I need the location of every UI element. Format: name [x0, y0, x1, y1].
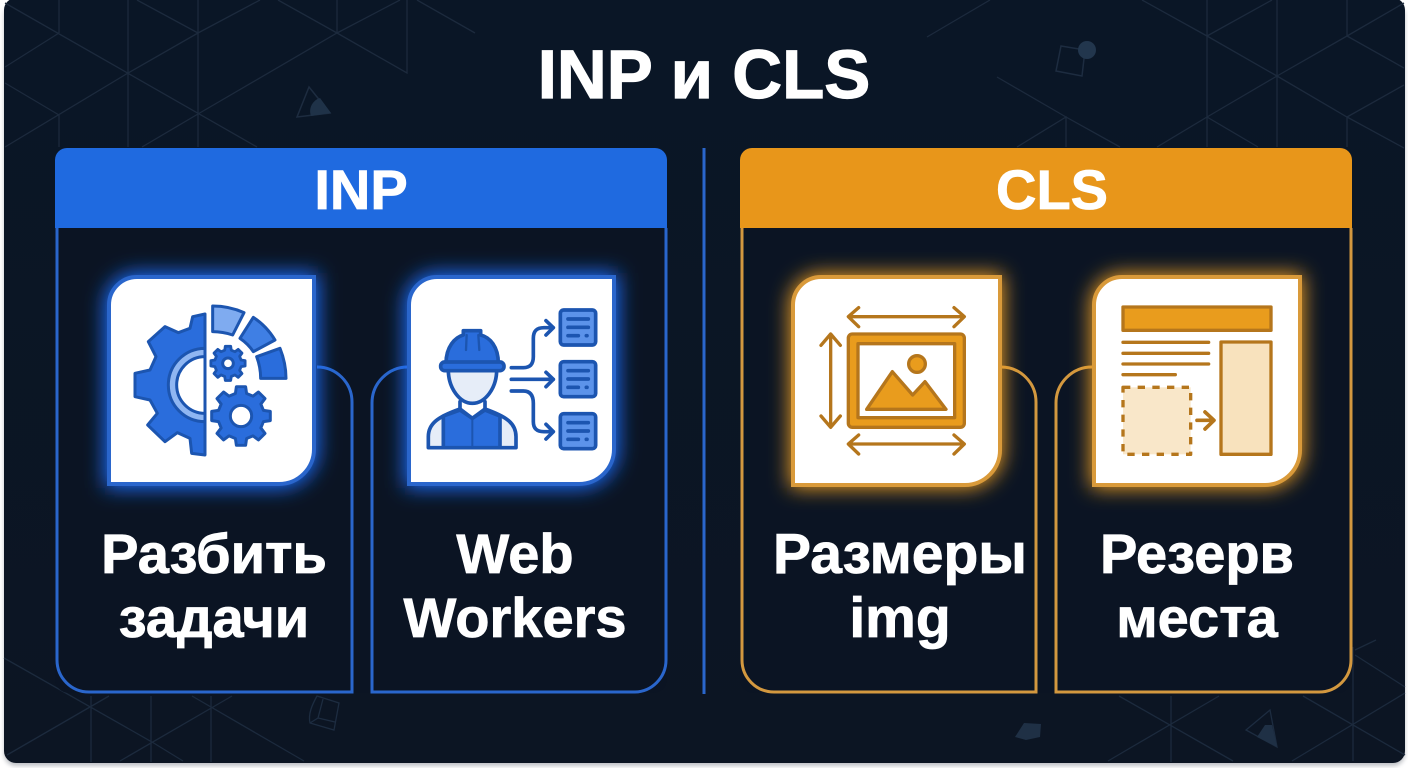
card: split tasks: [109, 277, 314, 484]
label: reserve space: места: [1116, 586, 1279, 649]
panel: CLS: [740, 148, 1352, 693]
title: INP и CLS: [538, 36, 870, 113]
background icon: triangle: [297, 87, 331, 117]
background icon: box: [309, 696, 339, 730]
panel: INP: [55, 148, 667, 693]
INP header: [55, 148, 667, 228]
icon: gears and progress: [135, 306, 286, 455]
label: image sizes: Размеры: [773, 522, 1027, 586]
divider: [702, 148, 706, 694]
icon: worker and task queue: [428, 310, 596, 449]
label: split tasks: Разбить: [101, 522, 327, 585]
connector: right bracket: [1056, 228, 1351, 692]
connector: left bracket: [742, 228, 1036, 692]
background icon: square and dot: [1056, 41, 1096, 76]
label: split tasks: задачи: [119, 586, 309, 649]
card: web workers: [409, 277, 614, 484]
label: web workers: Web: [456, 522, 574, 585]
INP heading: INP: [314, 158, 408, 221]
connector: right bracket: [372, 228, 666, 692]
CLS heading: CLS: [996, 158, 1108, 221]
background icon: blob: [1015, 723, 1041, 740]
background icon: triangle right: [1246, 710, 1277, 747]
icon: image with dimensions: [821, 308, 964, 454]
label: web workers: Workers: [403, 586, 627, 649]
card: reserve space: [1094, 277, 1300, 485]
label: image sizes: img: [849, 586, 951, 650]
CLS header: [740, 148, 1352, 228]
connector: left bracket: [57, 228, 352, 692]
label: reserve space: Резерв: [1100, 522, 1294, 585]
icon: page layout with reserved space: [1123, 307, 1271, 454]
card: image sizes: [793, 277, 1000, 485]
